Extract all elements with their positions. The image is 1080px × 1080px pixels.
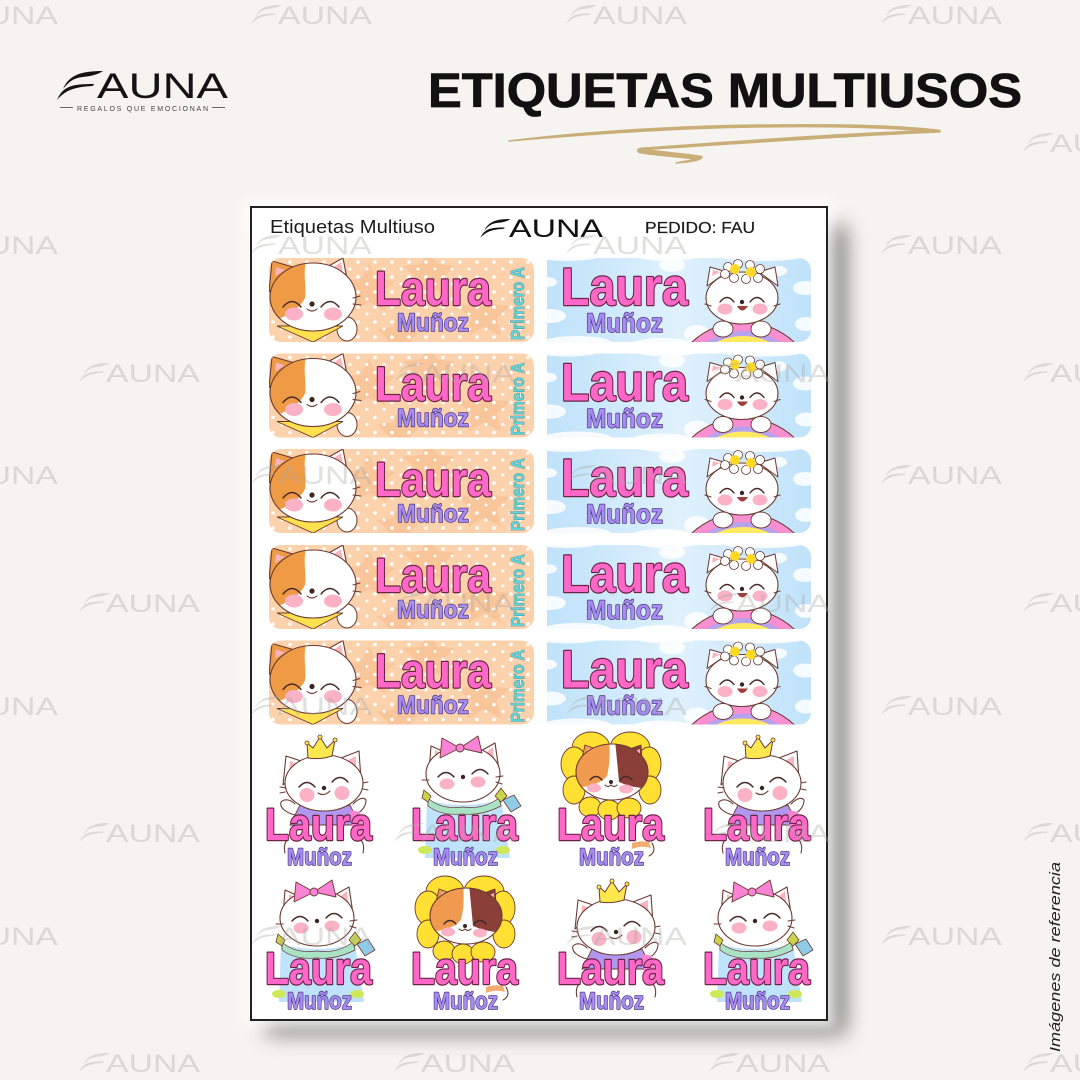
sticker: bow cat 1 bbox=[411, 736, 521, 871]
label row 3 right: Muñoz bbox=[586, 499, 663, 529]
sticker: crown cat 3: Laura bbox=[557, 943, 665, 994]
watermark pattern: AUNA bbox=[421, 820, 515, 848]
label row 2 right bbox=[534, 346, 818, 568]
sticker: crown cat 2: Laura bbox=[703, 799, 811, 850]
label row 4 right: Laura bbox=[561, 545, 688, 604]
sticker: crown cat 2 bbox=[703, 735, 811, 871]
sheet shadow bbox=[243, 199, 846, 1034]
title: ETIQUETAS MULTIUSOS bbox=[428, 65, 1022, 118]
label row 5 left bbox=[264, 630, 534, 738]
watermark pattern: AUNA bbox=[593, 462, 687, 490]
sticker: bow cat 3 bbox=[703, 880, 813, 1015]
sticker: bow cat 3: Laura bbox=[703, 943, 811, 994]
sticker: lion cat 1: Muñoz bbox=[579, 844, 644, 871]
watermark pattern: AUNA bbox=[278, 232, 372, 260]
watermark pattern: AUNA bbox=[736, 590, 830, 618]
label row 4 left: Muñoz bbox=[397, 596, 469, 624]
sticker: crown cat 1: Muñoz bbox=[287, 844, 352, 871]
label row 2 left: Muñoz bbox=[397, 404, 469, 432]
watermark pattern: AUNA bbox=[421, 590, 515, 618]
watermark pattern: AUNA bbox=[106, 360, 200, 388]
watermark pattern: AUNA bbox=[908, 693, 1002, 721]
label row 3 left: Primero A bbox=[508, 458, 528, 531]
sheet bbox=[251, 207, 827, 1020]
sheet heading: Etiquetas Multiuso bbox=[270, 216, 435, 237]
label row 3 right: Laura bbox=[561, 449, 688, 508]
watermark pattern: AUNA bbox=[278, 923, 372, 951]
sticker: bow cat 1: Laura bbox=[411, 799, 519, 850]
label row 5 right: Muñoz bbox=[586, 690, 663, 720]
sticker: crown cat 3 bbox=[557, 879, 665, 1015]
label row 1 left: Laura bbox=[375, 263, 491, 316]
label row 1 right: Laura bbox=[561, 258, 688, 317]
sticker: lion cat 2: Laura bbox=[411, 943, 519, 994]
label row 1 left: Primero A bbox=[508, 267, 528, 340]
watermark pattern: AUNA bbox=[908, 462, 1002, 490]
label row 3 left: Laura bbox=[375, 454, 491, 507]
label row 2 left: Primero A bbox=[508, 362, 528, 436]
sticker: bow cat 2: Muñoz bbox=[287, 988, 352, 1015]
watermark pattern: AUNA bbox=[421, 360, 515, 388]
label row 1 left bbox=[264, 248, 534, 356]
label row 1 right: Muñoz bbox=[586, 308, 663, 338]
watermark pattern: AUNA bbox=[908, 2, 1002, 30]
label row 3 left: Muñoz bbox=[397, 500, 469, 528]
watermark pattern: AUNA bbox=[278, 693, 372, 721]
sticker: lion cat 2: Muñoz bbox=[433, 988, 498, 1015]
sticker: lion cat 1 bbox=[557, 732, 665, 871]
watermark pattern: AUNA bbox=[593, 232, 687, 260]
label row 4 left: Primero A bbox=[508, 554, 528, 627]
sheet logo: AUNA bbox=[509, 215, 603, 243]
watermark pattern: AUNA bbox=[421, 1050, 515, 1078]
logo: FAUNA bbox=[57, 67, 229, 113]
label row 3 left bbox=[264, 439, 534, 547]
sheet logo bbox=[480, 215, 603, 243]
sticker: crown cat 1 bbox=[265, 735, 373, 871]
watermark pattern: AUNA bbox=[106, 1050, 200, 1078]
sticker: bow cat 1: Muñoz bbox=[433, 844, 498, 871]
watermark pattern: AUNA bbox=[106, 820, 200, 848]
sticker: lion cat 1: Laura bbox=[557, 799, 665, 850]
label row 5 left: Muñoz bbox=[397, 692, 469, 720]
watermark pattern: AUNA bbox=[593, 923, 687, 951]
watermark pattern: AUNA bbox=[593, 693, 687, 721]
watermark pattern: AUNA bbox=[908, 923, 1002, 951]
gold brush underline bbox=[509, 125, 940, 163]
sticker: bow cat 2 bbox=[265, 880, 375, 1015]
label row 4 left: Laura bbox=[375, 550, 491, 603]
label row 2 left: Laura bbox=[375, 358, 491, 412]
label row 4 left bbox=[264, 535, 534, 643]
sticker: crown cat 1: Laura bbox=[265, 799, 373, 850]
label row 2 right: Laura bbox=[561, 354, 688, 412]
sticker: lion cat 2 bbox=[411, 876, 519, 1015]
side note: Imágenes de referencia bbox=[1048, 862, 1064, 1052]
label row 5 left: Primero A bbox=[508, 649, 528, 722]
sticker: bow cat 2: Laura bbox=[265, 943, 373, 994]
label row 4 right bbox=[534, 538, 818, 759]
sticker: crown cat 2: Muñoz bbox=[725, 844, 790, 871]
watermark pattern: AUNA bbox=[593, 2, 687, 30]
order text: PEDIDO: FAU bbox=[645, 220, 755, 237]
sticker: crown cat 3: Muñoz bbox=[579, 988, 644, 1015]
watermark pattern: AUNA bbox=[736, 820, 830, 848]
label row 2 left bbox=[264, 344, 534, 452]
label row 5 right bbox=[534, 634, 818, 854]
sticker: bow cat 3: Muñoz bbox=[725, 988, 790, 1015]
label row 5 right: Laura bbox=[561, 640, 688, 700]
logo: FAUNA: REGALOS QUE EMOCIONAN bbox=[77, 106, 208, 113]
logo: FAUNA: AUNA bbox=[97, 67, 229, 106]
label row 1 left: Muñoz bbox=[397, 309, 469, 337]
watermark pattern: AUNA bbox=[736, 1050, 830, 1078]
watermark pattern: AUNA bbox=[908, 232, 1002, 260]
label row 2 right: Muñoz bbox=[586, 404, 663, 434]
label row 3 right bbox=[534, 442, 818, 663]
watermark pattern: AUNA bbox=[736, 360, 830, 388]
watermark pattern: AUNA bbox=[106, 590, 200, 618]
watermark pattern: AUNA bbox=[278, 2, 372, 30]
watermark pattern: AUNA bbox=[278, 462, 372, 490]
label row 1 right bbox=[534, 251, 818, 472]
label row 4 right: Muñoz bbox=[586, 595, 663, 625]
label row 5 left: Laura bbox=[375, 646, 491, 698]
